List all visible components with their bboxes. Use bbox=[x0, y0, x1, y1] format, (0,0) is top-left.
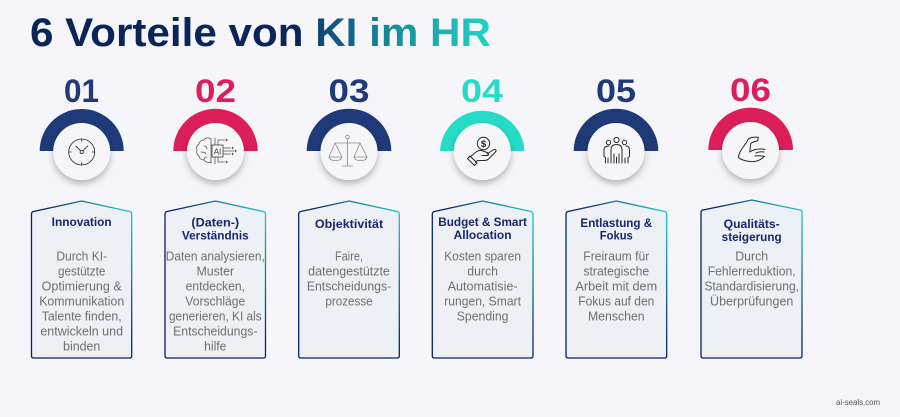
card body: Kosten sparen bbox=[444, 250, 521, 264]
panel: 02 (Daten-) Verständnis bbox=[165, 73, 266, 358]
card body: durch bbox=[467, 264, 498, 278]
card body bbox=[39, 250, 124, 354]
panel: 01 Innovation bbox=[32, 73, 132, 358]
panel: 04 Budget & Smart Allocation bbox=[432, 73, 533, 358]
card body: Fokus auf den bbox=[578, 294, 654, 308]
card body bbox=[575, 250, 657, 324]
card shape bbox=[299, 201, 399, 358]
card heading: (Daten-) bbox=[191, 218, 239, 230]
number 06: 06 bbox=[730, 72, 771, 108]
panel: 03 Objektivität bbox=[299, 73, 399, 358]
number 05: 05 bbox=[596, 73, 636, 109]
card body: Menschen bbox=[588, 310, 645, 324]
card heading bbox=[580, 218, 652, 242]
card body: hilfe bbox=[204, 340, 226, 354]
number 03: 03 bbox=[328, 73, 370, 109]
card body: Optimierung & bbox=[42, 280, 122, 294]
icon: AI brain: AI bbox=[214, 148, 221, 156]
card heading bbox=[182, 218, 249, 242]
icon circle bbox=[187, 123, 244, 180]
card heading: Budget & Smart bbox=[438, 217, 527, 229]
card body: entwickeln und bbox=[40, 324, 123, 338]
card heading bbox=[722, 219, 782, 244]
number 01: 01 bbox=[64, 73, 99, 109]
icon circle bbox=[320, 123, 378, 180]
card body: strategische bbox=[583, 264, 649, 278]
card body: Daten analysieren, bbox=[166, 250, 265, 264]
card body: prozesse bbox=[325, 294, 373, 308]
card heading: Entlastung & bbox=[580, 218, 652, 230]
card body bbox=[704, 250, 799, 308]
card body: Standardisierung, bbox=[704, 280, 799, 294]
card body: Entscheidungs- bbox=[173, 324, 257, 338]
icon: flexed arm bbox=[738, 137, 765, 162]
card body: binden bbox=[63, 340, 100, 354]
card heading bbox=[438, 217, 527, 242]
card body: Talente finden, bbox=[42, 310, 122, 324]
card heading: Objektivität bbox=[315, 219, 383, 231]
card shape bbox=[165, 201, 266, 358]
semicircle arc bbox=[40, 109, 124, 151]
card body: rungen, Smart bbox=[444, 294, 521, 308]
card heading: Allocation bbox=[454, 230, 512, 242]
icon circle bbox=[53, 123, 110, 180]
card body: Arbeit mit dem bbox=[575, 280, 657, 294]
card heading: Qualitäts- bbox=[724, 219, 780, 231]
icon circle bbox=[454, 123, 511, 180]
semicircle arc bbox=[708, 108, 793, 150]
card shape bbox=[566, 201, 667, 358]
card heading: Innovation bbox=[52, 217, 112, 229]
card body: entdecken, bbox=[186, 280, 245, 294]
card body: datengestützte bbox=[308, 264, 390, 278]
card body: gestützte bbox=[58, 264, 105, 278]
panel: 05 Entlastung & Fokus bbox=[566, 73, 667, 358]
card body: Muster bbox=[196, 264, 234, 278]
card body: Freiraum für bbox=[583, 250, 649, 264]
card body bbox=[444, 250, 521, 324]
card body: Entscheidungs- bbox=[307, 280, 391, 294]
number 04: 04 bbox=[461, 73, 503, 109]
card heading: Verständnis bbox=[182, 230, 249, 242]
card body: Überprüfungen bbox=[710, 294, 793, 308]
icon: people bbox=[604, 137, 630, 163]
card body: Durch bbox=[735, 250, 768, 264]
card body: Durch KI- bbox=[56, 250, 107, 264]
card body: Spending bbox=[457, 310, 508, 324]
number 02: 02 bbox=[195, 73, 236, 109]
icon: money hand: $ bbox=[481, 139, 487, 150]
card shape bbox=[701, 200, 802, 358]
card body: Kommunikation bbox=[39, 294, 124, 308]
panel: 06 Qualitätssteigerung bbox=[701, 72, 802, 358]
semicircle arc bbox=[440, 111, 524, 151]
card body: Fehlerreduktion, bbox=[708, 264, 796, 278]
icon: scales bbox=[329, 135, 367, 166]
card body: Faire, bbox=[335, 250, 363, 264]
semicircle arc bbox=[307, 109, 391, 151]
icon circle bbox=[588, 123, 644, 180]
card heading: Fokus bbox=[600, 230, 633, 242]
card heading: steigerung bbox=[722, 232, 782, 244]
card shape bbox=[32, 201, 132, 358]
icon: money hand bbox=[468, 137, 496, 166]
semicircle arc bbox=[574, 109, 658, 151]
card shape bbox=[432, 201, 533, 358]
footer source: ai-seals.com bbox=[836, 398, 880, 407]
icon circle bbox=[722, 122, 779, 179]
card body bbox=[307, 250, 391, 308]
icon: clock bbox=[69, 139, 95, 165]
card body: Vorschläge bbox=[185, 294, 245, 308]
icon: AI brain bbox=[197, 138, 237, 164]
card body: Automatisie- bbox=[448, 280, 518, 294]
card body: generieren, KI als bbox=[169, 310, 262, 324]
title: 6 Vorteile von KI im HR bbox=[30, 11, 491, 55]
card body bbox=[166, 250, 265, 354]
semicircle arc bbox=[173, 109, 258, 151]
